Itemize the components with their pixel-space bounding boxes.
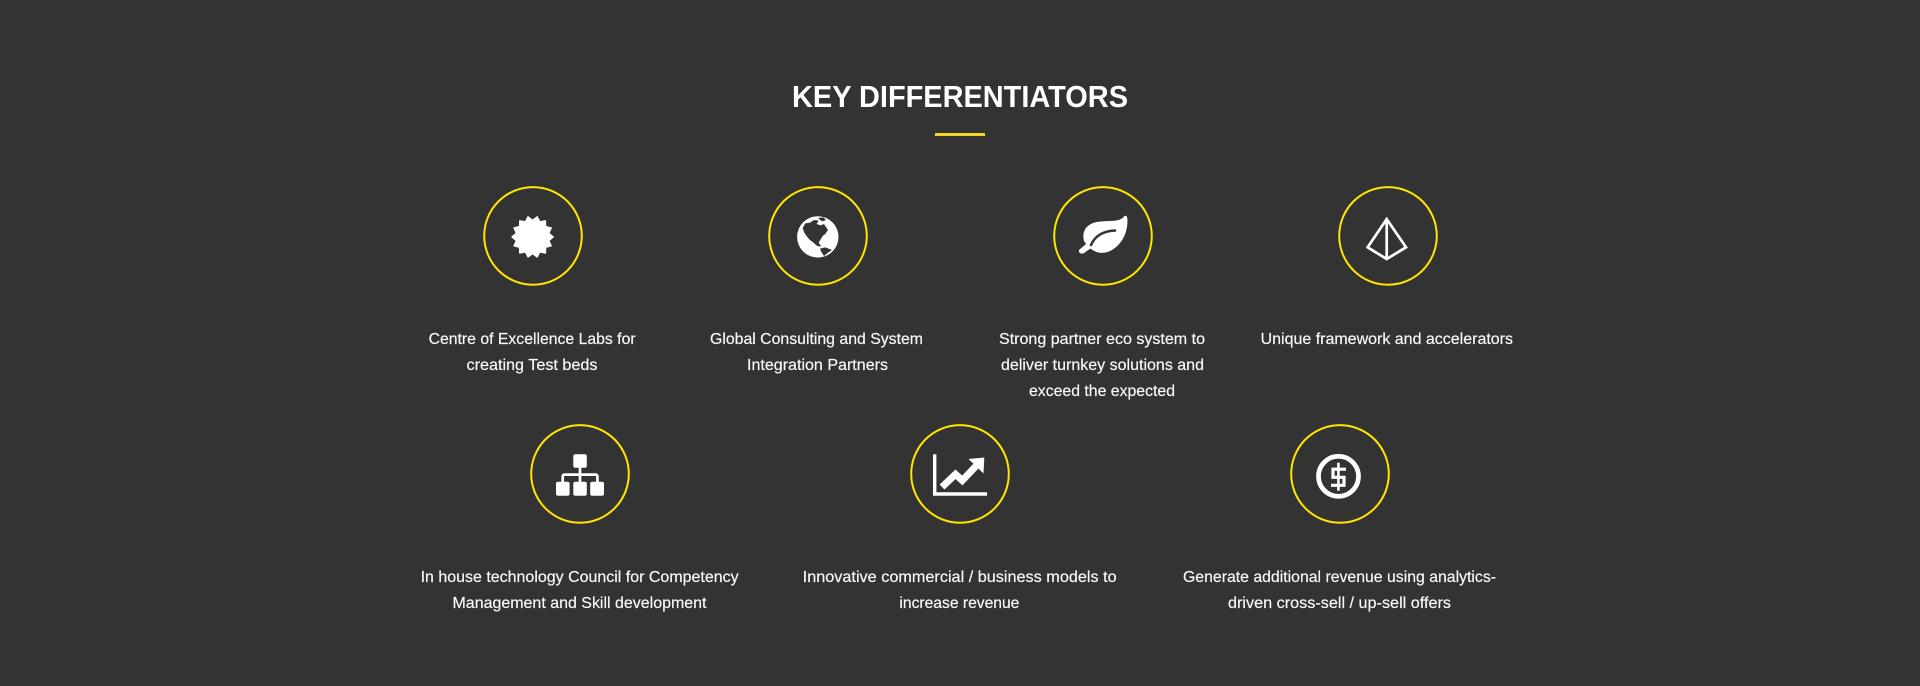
icon: leaf bbox=[1079, 216, 1127, 254]
label: Management and Skill development bbox=[452, 595, 707, 612]
icon circle bbox=[531, 425, 629, 523]
icon circle bbox=[1054, 187, 1152, 285]
icon circle bbox=[1291, 425, 1389, 523]
label: creating Test beds bbox=[466, 357, 598, 374]
title underline bbox=[935, 133, 985, 136]
label: Integration Partners bbox=[747, 357, 888, 374]
label bbox=[429, 331, 636, 374]
label: Centre of Excellence Labs for bbox=[429, 331, 636, 348]
item: technology council bbox=[421, 425, 739, 612]
icon: pyramid bbox=[1368, 219, 1406, 259]
label bbox=[803, 569, 1117, 612]
label: increase revenue bbox=[899, 595, 1019, 612]
item: framework and accelerators bbox=[1261, 187, 1513, 348]
item: centre of excellence bbox=[429, 187, 636, 374]
icon circle bbox=[1339, 187, 1437, 285]
icon: badge bbox=[512, 216, 554, 257]
label: Unique framework and accelerators bbox=[1261, 331, 1513, 348]
label bbox=[710, 331, 923, 374]
label: Global Consulting and System bbox=[710, 331, 923, 348]
item: global consulting bbox=[710, 187, 923, 374]
icon circle bbox=[769, 187, 867, 285]
item: commercial models bbox=[803, 425, 1117, 612]
icon: dollar bbox=[1318, 456, 1358, 496]
label: Generate additional revenue using analytics- bbox=[1183, 569, 1496, 586]
icon: org chart bbox=[556, 454, 604, 496]
label bbox=[421, 569, 739, 612]
icon: growth chart bbox=[935, 454, 987, 494]
label: exceed the expected bbox=[1029, 383, 1175, 400]
title: KEY DIFFERENTIATORS bbox=[792, 79, 1128, 114]
icon circle bbox=[484, 187, 582, 285]
label: In house technology Council for Competency bbox=[421, 569, 739, 586]
label: Innovative commercial / business models to bbox=[803, 569, 1117, 586]
item: partner eco system bbox=[999, 187, 1205, 400]
label: driven cross-sell / up-sell offers bbox=[1228, 595, 1451, 612]
label: deliver turnkey solutions and bbox=[1001, 357, 1204, 374]
icon circle bbox=[911, 425, 1009, 523]
label bbox=[999, 331, 1205, 400]
label: Strong partner eco system to bbox=[999, 331, 1205, 348]
label bbox=[1183, 569, 1496, 612]
item: additional revenue bbox=[1183, 425, 1496, 612]
icon: globe bbox=[797, 216, 838, 258]
